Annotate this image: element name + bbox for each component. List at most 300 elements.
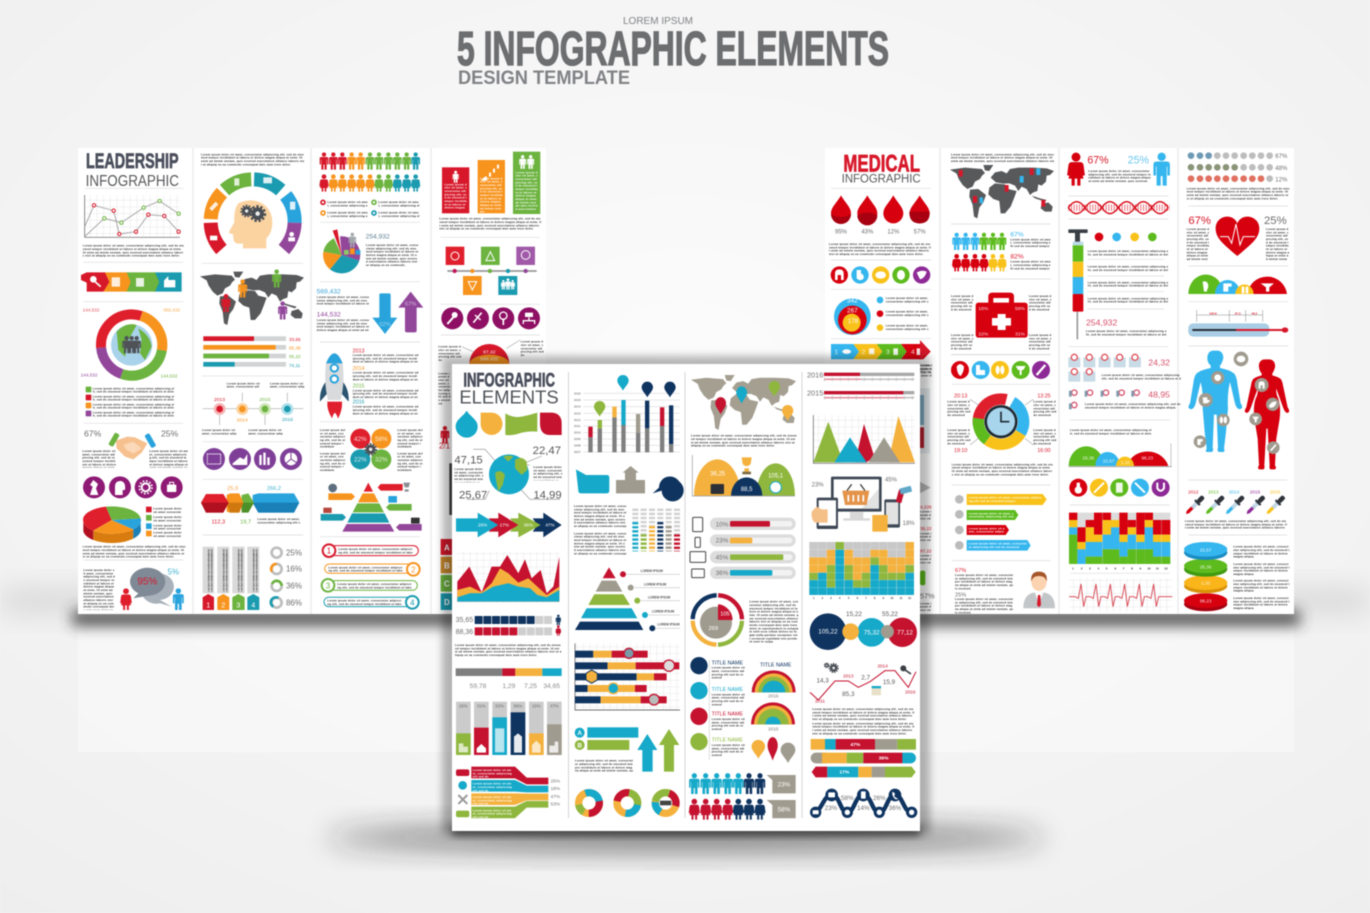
heat grid: 9 — [1139, 566, 1141, 570]
heatmap columns: 9 — [883, 596, 885, 600]
puzzle band — [81, 272, 182, 292]
droppers: 2014 — [1229, 489, 1240, 494]
medical box icons: 24,32 — [1148, 358, 1170, 368]
column: elements column 2 lower — [575, 643, 680, 817]
rainbows — [751, 663, 796, 763]
eyebrow: LOREM IPSUM — [623, 16, 693, 27]
dots of partly hidden chart — [920, 340, 935, 612]
heat grid: 6 — [1114, 566, 1116, 570]
rocket timeline: 2013 — [353, 348, 365, 354]
dots of partly hidden chart: 57% — [920, 591, 935, 600]
wave diagram: 58% — [841, 795, 854, 802]
column: leadership lower 2 — [201, 382, 305, 610]
title name timeline: TITLE NAME — [712, 738, 743, 744]
building column bars: 25% — [459, 703, 468, 708]
column: medical column 4 lower — [1183, 351, 1290, 611]
A B bars with arrows: B — [577, 742, 582, 749]
droppers — [1183, 489, 1287, 517]
percent notes: Lorem ipsum dolor sit amet, consectetur adipiscing elit, sed do eiusmod tempor incididunt ut labore et dolore magna aliqua ut enim ad minim veniam, quis nostrud. — [955, 573, 1013, 590]
column: medical column 2 lower — [920, 340, 1057, 614]
rocket timeline: 2016 — [353, 400, 365, 406]
heat grid: 2 — [1081, 566, 1083, 570]
segmented bars: 17% — [839, 770, 850, 776]
dome icons — [1188, 274, 1287, 294]
clock donut: Lorem ipsum dolor sit amet, consectetur adipiscing elit sed do eiusmod — [1033, 400, 1056, 417]
small donuts: 86% — [286, 598, 302, 607]
bar chart with pins: 2007 — [574, 450, 581, 454]
big numbers with arrows: 569,432 — [317, 288, 341, 295]
horizontal bar chart: 55,22 — [289, 354, 301, 359]
vertical numbered tabs: 3 — [236, 601, 240, 610]
rocket timeline: 2014 — [353, 366, 365, 372]
ribbon flow: 53% — [551, 802, 560, 807]
clock donut: 13:25 — [1037, 393, 1051, 399]
heatmap columns: 7 — [865, 596, 867, 600]
first aid kit: Lorem ipsum dolor sit amet, consectetur adipiscing elit sed do eiusmod — [951, 333, 974, 350]
red line chart: 85,3 — [842, 691, 855, 698]
column: medical column 1 — [829, 151, 933, 377]
heat grid: 5 — [1106, 566, 1108, 570]
heading: infographic: INFOGRAPHIC — [463, 371, 555, 392]
wave diagram: 14% — [857, 805, 870, 812]
rainbows: 2016 — [768, 694, 779, 699]
letter tabs: A — [444, 543, 450, 552]
pyramid labelled: LOREM IPSUM — [644, 582, 667, 586]
first aid kit: 16% — [978, 306, 989, 312]
handshake block: 25% — [161, 429, 179, 439]
nested circles: 342 — [847, 298, 858, 305]
stacked bar: 59,78 — [470, 683, 487, 690]
heatmap columns: 12 — [908, 596, 912, 600]
arrow chain: 47% — [545, 523, 555, 528]
stacked bar — [456, 668, 562, 690]
3D arrow chain: 112,3 — [211, 519, 225, 525]
devices — [812, 477, 915, 532]
red female body — [1245, 359, 1289, 469]
heatmap columns: 2 — [822, 596, 824, 600]
percent notes: 67% — [955, 568, 966, 574]
dot rows: 48% — [1275, 166, 1288, 172]
clock donut: 16:00 — [1037, 448, 1051, 454]
people rows — [319, 152, 420, 192]
heatmap columns: 1 — [813, 596, 815, 600]
letter tabs: C — [444, 580, 450, 589]
thermometer: 120,6 — [1209, 311, 1217, 315]
gender stats: Lorem ipsum dolor sit amet, consectetur adipiscing elit, sed do eiusmod tempor incididunt ut labore et dolore magna aliqua ut enim ad minim veniam, quis nostrud. — [1088, 169, 1151, 183]
donut labels: 144,532 — [83, 307, 100, 312]
square meters: 88,36 — [456, 629, 473, 636]
column: elements column 4 upper — [807, 370, 915, 600]
bubble row: 75,32 — [864, 629, 880, 636]
3D arrow chain: 25,9 — [227, 486, 238, 492]
bar chart with pins — [574, 375, 680, 454]
blood drops: 12% — [887, 229, 900, 235]
title name timeline: Lorem ipsum dolor sit amet, consectetur adipiscing elit sed do eiusmod — [712, 717, 745, 731]
vertical numbered tabs: Lorem ipsum dolor sit amet, consectetur adipiscing elit sed do — [210, 548, 214, 592]
color cards: Lorem ipsum dolor sit amet, consectetur adipiscing elit, sed do eiusmod tempor incididunt ut labore et dolore magna aliqua ut enim ad minim veniam — [480, 177, 503, 213]
blood drops — [831, 195, 930, 235]
text block: Lorem ipsum dolor sit amet, consectetur adipiscing elit, sed do eiusmod tempor incididunt ut labore et dolore magna aliqua ut enim. Ut enim ad minim veniam, quis nostrud exercitation ullamco laboris nisi ut aliquip ex ea commodo consequat duis aute irure dolor. — [952, 463, 1053, 476]
numbered list — [322, 544, 420, 609]
title block — [457, 16, 889, 89]
pie chart: 254,932 — [366, 233, 390, 240]
ribbon flow: 25% — [551, 778, 560, 783]
progress pills: 45% — [716, 555, 729, 562]
text block: Lorem ipsum dolor sit amet, consectetur adipiscing elit, sed do eiusmod tempor incididunt ut labore et dolore magna aliqua ut enim. Ut enim ad minim veniam, quis nostrud exercitation ullamco laboris nisi ut aliquip ex ea commodo consequat duis aute irure dolor. — [201, 153, 304, 166]
four circles with gear: 42% — [354, 436, 367, 443]
donut labels: 144,532 — [81, 373, 98, 378]
column: leadership column 4 — [438, 152, 544, 364]
gantt chart — [575, 643, 680, 710]
stacked discs: 25,36 — [1200, 564, 1212, 569]
column: elements column 3 lower — [689, 594, 799, 820]
clock donut: Lorem ipsum dolor sit amet, consectetur adipiscing elit sed do eiusmod — [947, 428, 970, 445]
pie chart — [323, 229, 419, 273]
donut labels: 144,532 — [161, 374, 178, 379]
vertical numbered tabs: 4 — [251, 601, 255, 610]
nested circles: 267 — [847, 308, 858, 315]
syringe chart: 254,932 — [1086, 317, 1117, 327]
numbered arrow chain: 3 — [886, 349, 890, 356]
heat grid: 10 — [1147, 566, 1151, 570]
icon shapes row — [576, 466, 684, 501]
rocket timeline — [320, 348, 419, 419]
heading: medical: MEDICAL — [843, 151, 920, 178]
stacked discs: Lorem ipsum dolor sit amet, consectetur adipiscing elit, sed do eiusmod tempor incididunt ut labore et dolore magna aliqua. — [1233, 562, 1290, 576]
icon row: medical tools — [1069, 479, 1170, 497]
four circles with gear: Lorem ipsum dolor sit amet, consectetur adipiscing elit, sed do eiusmod tempor incididunt — [320, 428, 345, 448]
ribbon flow: Lorem ipsum dolor sit amet, consectetur adipiscing elit sed do — [473, 782, 512, 792]
ring chart — [692, 594, 799, 648]
people pictogram with tags: 23% — [778, 782, 791, 789]
gender stats: 25% — [1128, 154, 1150, 166]
numbered list: 1 — [327, 547, 332, 556]
title name timeline: Lorem ipsum dolor sit amet, consectetur adipiscing elit sed do eiusmod — [712, 666, 745, 679]
segmented ring with head — [193, 162, 312, 281]
column: elements column 3 upper — [690, 375, 797, 579]
heat grid: 7 — [1123, 566, 1125, 570]
dome chart — [1069, 443, 1172, 467]
column: elements column 1 lower — [455, 615, 562, 819]
building column bars: 96% — [514, 703, 522, 708]
organ badges — [1194, 352, 1280, 454]
arrow labels: Lorem ipsum dolor sit amet, consectetur adipiscing elit sed. — [969, 512, 1014, 518]
heat grid: 8 — [1131, 566, 1133, 570]
column: medical column 3 upper — [1067, 153, 1170, 347]
dots of partly hidden chart: 4,226 — [920, 504, 932, 509]
lab icons: Lorem ipsum dolor sit amet, consectetur adipiscing elit, sed do eiusmod tempor incididunt ut labore et dolore magna aliqua. — [1085, 402, 1181, 409]
nested circles: 178 — [848, 318, 859, 325]
title name timeline — [690, 657, 745, 760]
red line chart: 2016 — [905, 689, 916, 694]
icon row: purple circles — [203, 448, 302, 470]
text block: Lorem ipsum dolor sit amet, consectetur adipiscing elit, sed do eiusmod tempor incididunt ut labore et dolore magna aliqua ut enim. Ut enim ad minim veniam, quis nostrud exercitation ullamco laboris nisi ut aliquip ex ea commodo consequat duis aute irure dolor. — [439, 217, 541, 230]
stacked bar: 1,29 — [502, 683, 516, 690]
bar chart with pins: 2011 — [574, 424, 581, 428]
clock donut: 19:10 — [954, 448, 967, 454]
pyramid labelled: LOREM IPSUM — [648, 595, 671, 599]
semi dome — [438, 340, 544, 364]
column: leadership lower 1 — [82, 387, 188, 610]
floor band shadow — [0, 590, 1370, 752]
vertical numbered tabs: Lorem ipsum dolor sit amet, consectetur adipiscing elit sed do — [206, 548, 210, 592]
horizontal bar chart — [203, 336, 301, 368]
shape row — [456, 411, 562, 438]
column: leadership upper 2 — [193, 153, 312, 376]
center poster shadow — [326, 356, 1046, 849]
dome chart: 88,5 — [741, 487, 753, 493]
heat grid: 11 — [1156, 566, 1159, 570]
world map with markers — [950, 165, 1054, 218]
horizontal bar chart: 65,38 — [289, 346, 301, 351]
pyramid labelled: LOREM IPSUM — [652, 609, 675, 613]
heat grid: 3 — [1089, 566, 1091, 570]
text blocks: Lorem ipsum dolor sit amet, consectetur adipiscing elit, sed do eiusmod tempor incididunt ut labore et dolore magna aliqua ut enim. Ut enim ad minim veniam, quis nostrud exercitation ullamco laboris nisi ut aliquip ex ea commodo consequat duis aute irure dolor. — [812, 722, 914, 735]
color cards — [442, 152, 540, 214]
semi dome: Lorem ipsum dolor sit amet, consectetur adipiscing elit sed do — [521, 340, 544, 357]
triangle chart — [813, 415, 915, 463]
first aid kit — [951, 293, 1052, 350]
four circles with gear: Lorem ipsum dolor sit amet, consectetur adipiscing elit, sed do eiusmod tempor incididunt — [397, 428, 423, 448]
A B bars with arrows: A — [577, 730, 582, 737]
medical box icons — [1068, 354, 1182, 382]
progress pills — [690, 517, 796, 579]
wave diagram — [810, 789, 917, 818]
people pictogram with tags: 58% — [778, 807, 791, 814]
heading: elements: ELEMENTS — [459, 386, 559, 407]
building column bars — [456, 702, 562, 755]
segmented bars: 47% — [850, 742, 861, 748]
3D arrow chain: 266,2 — [267, 486, 281, 492]
ribbon flow — [456, 767, 560, 819]
four circles with gear: 32% — [375, 457, 388, 464]
blood drops: 57% — [914, 229, 926, 235]
pie chart: Lorem ipsum dolor sit amet, consectetur adipiscing elit, sed do eiusmod tempor incididunt ut labore et dolore magna aliqua ut enim. Ut enim ad minim veniam, quis nostrud exercitation ullamco laboris nisi ut aliquip ex ea commodo. — [366, 243, 418, 267]
color cards: Lorem ipsum dolor sit amet, consectetur adipiscing elit, sed do eiusmod tempor incididunt ut labore et dolore magna aliqua ut enim ad minim veniam quis nostrud exercitation — [515, 171, 538, 211]
big numbers with arrows — [317, 288, 423, 334]
donut chart with globe — [93, 306, 171, 384]
red line chart: 2014 — [877, 664, 888, 669]
dome chart: 36,25 — [710, 472, 726, 478]
segmented bars: 36% — [879, 756, 889, 762]
bubble row: 77,12 — [897, 629, 913, 636]
devices: 18% — [903, 521, 915, 527]
main title: 5 INFOGRAPHIC ELEMENTS — [457, 23, 889, 76]
numbered arrow chain: 1 — [834, 349, 838, 356]
dot rows — [1188, 152, 1288, 183]
doctor — [1023, 572, 1055, 608]
heading: infographic: INFOGRAPHIC — [842, 172, 921, 186]
title name timeline: TITLE NAME — [712, 660, 743, 666]
speech bubbles: 5% — [168, 568, 179, 577]
numbered list: 2 — [411, 565, 416, 574]
heading: leadership: LEADERSHIP — [86, 149, 179, 173]
dome chart: 22,67 — [1103, 459, 1115, 464]
big numbers with arrows: 67% — [405, 302, 416, 308]
stacked discs: 98,23 — [1200, 599, 1212, 604]
arrow chain — [456, 513, 562, 537]
thermometer: 46,3 — [1251, 311, 1258, 315]
heat grid: 4 — [1097, 566, 1099, 570]
partly hidden text: Lorem ipsum dolor sit amet, consectetur adipiscing elit sed do eiusmod — [438, 372, 451, 405]
icon row: organ circles — [831, 266, 930, 284]
title name timeline: TITLE NAME — [712, 712, 743, 718]
ribbon flow: Lorem ipsum dolor sit amet, consectetur adipiscing elit sed do — [473, 809, 512, 819]
dots of partly hidden chart: Lorem ipsum dolor sit — [920, 602, 931, 612]
arrow labels — [955, 494, 1047, 551]
small pie donuts — [575, 789, 680, 817]
arrow chain: 25% — [478, 523, 487, 528]
bar chart with pins: 2016 — [574, 391, 581, 395]
pyramid labelled: LOREM IPSUM — [657, 623, 680, 627]
heart block — [1187, 215, 1289, 262]
gender stats: 67% — [1087, 154, 1109, 166]
stacked discs: 22,67 — [1200, 547, 1212, 552]
four circles with gear: 58% — [375, 436, 388, 443]
ring chart: 105 — [720, 612, 730, 618]
column: medical column 2 — [950, 153, 1055, 355]
devices: 45% — [885, 478, 898, 484]
heatmap columns: 8 — [874, 596, 876, 600]
small donuts: 36% — [286, 582, 302, 591]
stacked discs: Lorem ipsum dolor sit amet, consectetur adipiscing elit, sed do eiusmod tempor incididunt ut labore et dolore magna aliqua. — [1233, 596, 1290, 610]
droppers: 2013 — [1208, 489, 1219, 494]
vertical numbered tabs: 1 — [206, 601, 210, 610]
building column bars: 53% — [495, 703, 504, 708]
globe callouts: 14,99 — [533, 489, 562, 501]
column: leadership upper 1 — [81, 149, 184, 384]
text block: Lorem ipsum dolor sit amet, consectetur adipiscing elit, sed do eiusmod tempor incididunt ut labore et dolore magna aliqua ut enim. Ut enim ad minim veniam, quis nostrud exercitation ullamco laboris nisi ut aliquip ex ea commodo consequat duis aute irure dolor. — [455, 643, 561, 657]
vertical numbered tabs: 2 — [221, 601, 225, 610]
small donuts: 25% — [286, 548, 302, 557]
bar chart with pins: 2013 — [574, 411, 581, 415]
numbered list: 3 — [326, 581, 331, 590]
heart block: 25% — [1264, 215, 1287, 227]
dome chart: 98,23 — [1141, 455, 1154, 460]
heatmap columns: 3 — [830, 596, 832, 600]
rainbows: 2015 — [768, 727, 779, 732]
heading: infographic: INFOGRAPHIC — [86, 173, 179, 190]
bubble row: 55,22 — [882, 611, 898, 618]
blood drops: 95% — [835, 229, 848, 235]
icon row: magenta circles — [83, 476, 183, 498]
ECG strip — [1069, 578, 1172, 612]
text block: Lorem ipsum dolor sit amet, consectetur adipiscing elit, sed do eiusmod tempor incididunt ut labore et dolore magna aliqua ut enim. Ut enim ad minim veniam, quis nostrud exercitation ullamco laboris nisi ut aliquip ex ea commodo consequat duis aute irure dolor. — [829, 242, 931, 256]
people pictogram: 82% — [1010, 254, 1024, 261]
bubble row — [810, 611, 917, 650]
dome chart: 105,1 — [768, 473, 784, 479]
bar chart with pins: 2010 — [574, 431, 581, 435]
text block: Lorem ipsum dolor sit amet, consectetur adipiscing elit, sed do eiusmod tempor incididunt ut labore et dolore magna aliqua ut enim. Ut enim ad minim veniam, quis nostrud exercitation ullamco laboris nisi ut aliquip ex ea commodo consequat duis aute irure dolor. — [691, 434, 797, 447]
gender stats — [1067, 153, 1170, 188]
thermometer: 27,3 — [1235, 311, 1241, 315]
speech bubbles — [120, 568, 184, 610]
bar chart with pins: 2008 — [574, 443, 581, 447]
numbered arrow chain: 4 — [911, 349, 915, 356]
speech bubbles: 95% — [137, 577, 157, 588]
square meters: 35,65 — [456, 617, 473, 624]
year progress rulers — [807, 370, 914, 398]
timeline — [202, 382, 305, 436]
stacked discs: Lorem ipsum dolor sit amet, consectetur adipiscing elit, sed do eiusmod tempor incididunt ut labore et dolore magna aliqua. — [1233, 579, 1290, 592]
bar chart with pins: 2012 — [574, 418, 581, 422]
vertical numbered tabs: Lorem ipsum dolor sit amet, consectetur adipiscing elit sed do — [255, 548, 259, 592]
panel: infographic elements poster — [452, 364, 920, 831]
column: elements column 4 lower — [810, 611, 917, 818]
globe callouts: 25,67 — [459, 489, 487, 501]
progress pills: 23% — [716, 537, 729, 544]
title name timeline: TITLE NAME — [712, 687, 743, 693]
world map with people — [200, 269, 304, 325]
globe callouts — [454, 445, 563, 501]
3D arrow chain — [201, 486, 302, 525]
pyramid labelled — [575, 567, 680, 631]
horizontal bar chart: 33,66 — [289, 337, 301, 342]
3D pie chart — [83, 506, 182, 543]
big numbers with arrows: 144,532 — [317, 312, 341, 319]
bubble row: 105,22 — [818, 629, 838, 636]
column: medical column 3 lower — [1068, 354, 1182, 612]
donut labels: 055,432 — [163, 307, 181, 312]
DNA strand — [1068, 202, 1170, 214]
column: medical column 4 upper — [1187, 152, 1290, 346]
red line chart: 2011 — [815, 698, 825, 703]
vertical numbered tabs — [203, 547, 259, 610]
A B bars with arrows — [575, 727, 679, 772]
wave diagram: 26% — [873, 795, 886, 802]
column: elements column 2 upper — [574, 375, 684, 631]
column: hidden leadership remnants — [438, 372, 453, 610]
building column bars: 31% — [477, 703, 486, 708]
horizontal bar chart: 74,11 — [289, 363, 301, 368]
arrow labels: Lorem ipsum dolor sit amet, consectetur adipiscing elit sed do eiusmod tempor. — [969, 496, 1042, 503]
heart block: 67% — [1188, 215, 1211, 227]
heatmap columns: 11 — [900, 596, 903, 600]
heat grid — [1069, 513, 1170, 570]
people pictogram with tags — [689, 773, 796, 820]
heatmap columns: 6 — [857, 596, 859, 600]
letter tabs — [441, 539, 453, 610]
column: elements column 1 upper — [454, 371, 563, 603]
dots of partly hidden chart: 36,22 — [920, 526, 932, 531]
area chart — [457, 552, 560, 603]
globe callouts: 47,15 — [454, 454, 483, 466]
pyramid — [321, 483, 422, 532]
text blocks — [812, 707, 915, 735]
first aid kit: 58% — [1015, 306, 1026, 312]
ring chart: 269 — [709, 626, 718, 632]
dots of partly hidden chart: Lorem ipsum dolor sit — [920, 510, 931, 520]
stacked discs — [1184, 542, 1290, 611]
vertical numbered tabs: Lorem ipsum dolor sit amet, consectetur adipiscing elit sed do — [240, 548, 244, 592]
four circles with gear: Lorem ipsum dolor sit amet, consectetur adipiscing elit, sed do eiusmod tempor incididunt — [320, 452, 345, 472]
timeline: 2013 — [214, 397, 225, 403]
dots of partly hidden chart: Lorem ipsum dolor sit — [920, 554, 931, 564]
dash grid — [635, 509, 677, 551]
ribbon flow: Lorem ipsum dolor sit amet, consectetur adipiscing elit sed do — [473, 768, 512, 778]
rainbows: TITLE NAME — [760, 663, 792, 669]
column: leadership lower 3 — [320, 348, 423, 609]
segmented bars — [811, 739, 916, 777]
text block: Lorem ipsum dolor sit amet, consectetur adipiscing elit, sed do eiusmod tempor incididunt ut labore et dolore magna aliqua ut enim. Ut enim ad minim veniam, quis nostrud exercitation ullamco laboris nisi ut aliquip ex ea commodo consequat duis aute irure dolor. — [83, 545, 186, 558]
letter tabs: D — [444, 598, 450, 607]
lab icons — [1069, 389, 1182, 410]
first aid kit: Lorem ipsum dolor sit amet, consectetur adipiscing elit sed do eiusmod — [951, 294, 974, 311]
syringe chart — [1068, 229, 1168, 339]
blood drops: 43% — [861, 229, 874, 235]
legend rows — [86, 387, 174, 417]
heat grid: 12 — [1164, 566, 1168, 570]
